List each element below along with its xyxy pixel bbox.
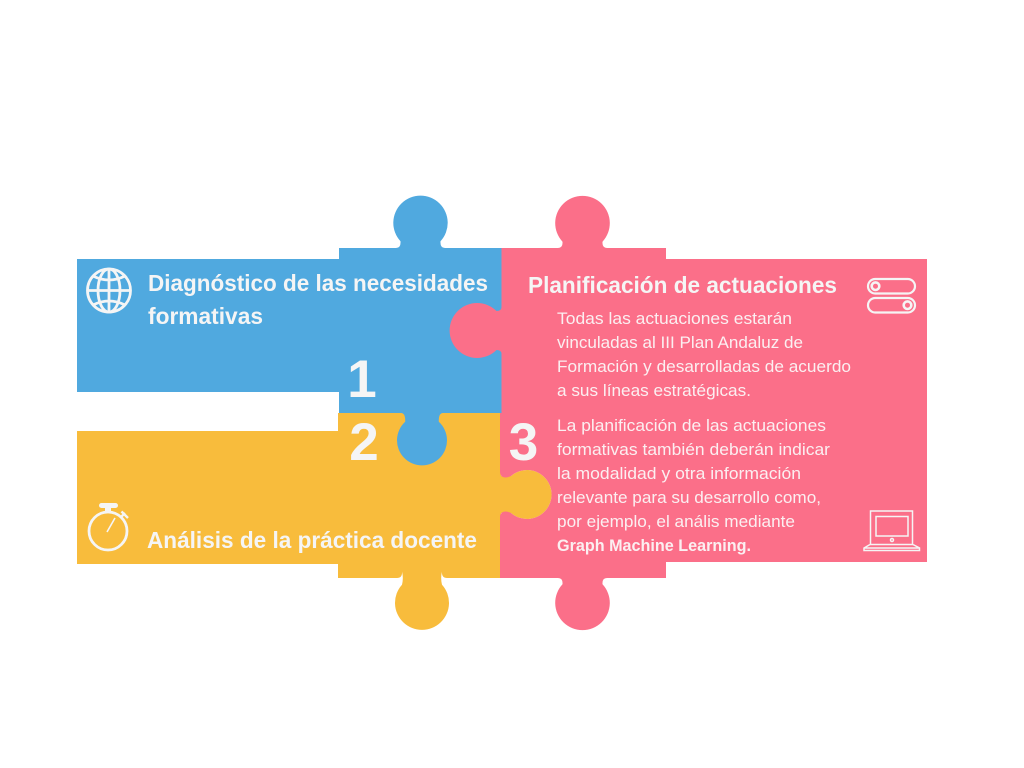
text block: first paragraph: a sus líneas estratégicas. [557, 382, 751, 400]
puzzle piece: yellow [77, 413, 552, 630]
icon: laptop [864, 511, 920, 550]
text block: second paragraph: relevante para su desarrollo como, [557, 489, 821, 507]
heading: analisis: Análisis de la práctica docente [147, 527, 477, 553]
heading: planificacion: Planificación de actuaciones [528, 272, 837, 298]
puzzle piece: pink [450, 196, 927, 630]
heading: diagnostico: Diagnóstico de las necesidades [148, 270, 488, 296]
text block: second paragraph: por ejemplo, el anális mediante [557, 513, 795, 531]
text block: second paragraph: Graph Machine Learning. [557, 537, 751, 555]
heading: diagnostico: formativas [148, 303, 263, 329]
text block: second paragraph: formativas también deberán indicar [557, 441, 831, 459]
number 2: 2 [349, 413, 379, 472]
text block: first paragraph: Formación y desarrolladas de acuerdo [557, 358, 851, 376]
number 1: 1 [347, 350, 377, 409]
text block: first paragraph: Todas las actuaciones estarán [557, 310, 792, 328]
text block: second paragraph: la modalidad y otra información [557, 465, 801, 483]
number 3: 3 [509, 413, 538, 472]
text block: first paragraph: vinculadas al III Plan Andaluz de [557, 334, 803, 352]
icon: globe [88, 269, 130, 312]
icon: toggles [868, 279, 915, 312]
icon: stopwatch [89, 506, 128, 550]
puzzle piece: blue [77, 196, 502, 465]
text block: second paragraph: La planificación de las actuaciones [557, 417, 826, 435]
